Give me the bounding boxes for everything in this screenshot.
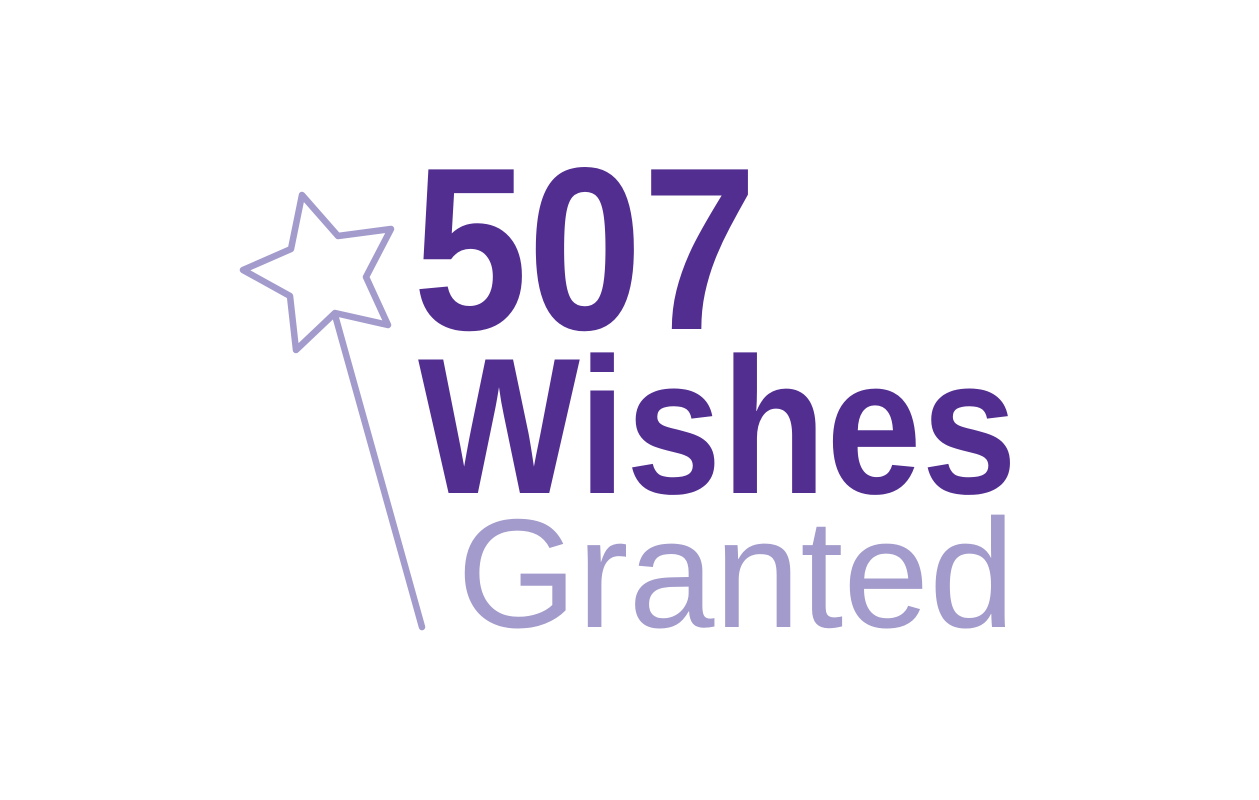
heading: 507: 507 [413, 120, 757, 379]
icon: magic wand [243, 195, 422, 627]
heading: Granted: Granted [457, 487, 1015, 660]
heading: Wishes: Wishes [418, 318, 1017, 535]
